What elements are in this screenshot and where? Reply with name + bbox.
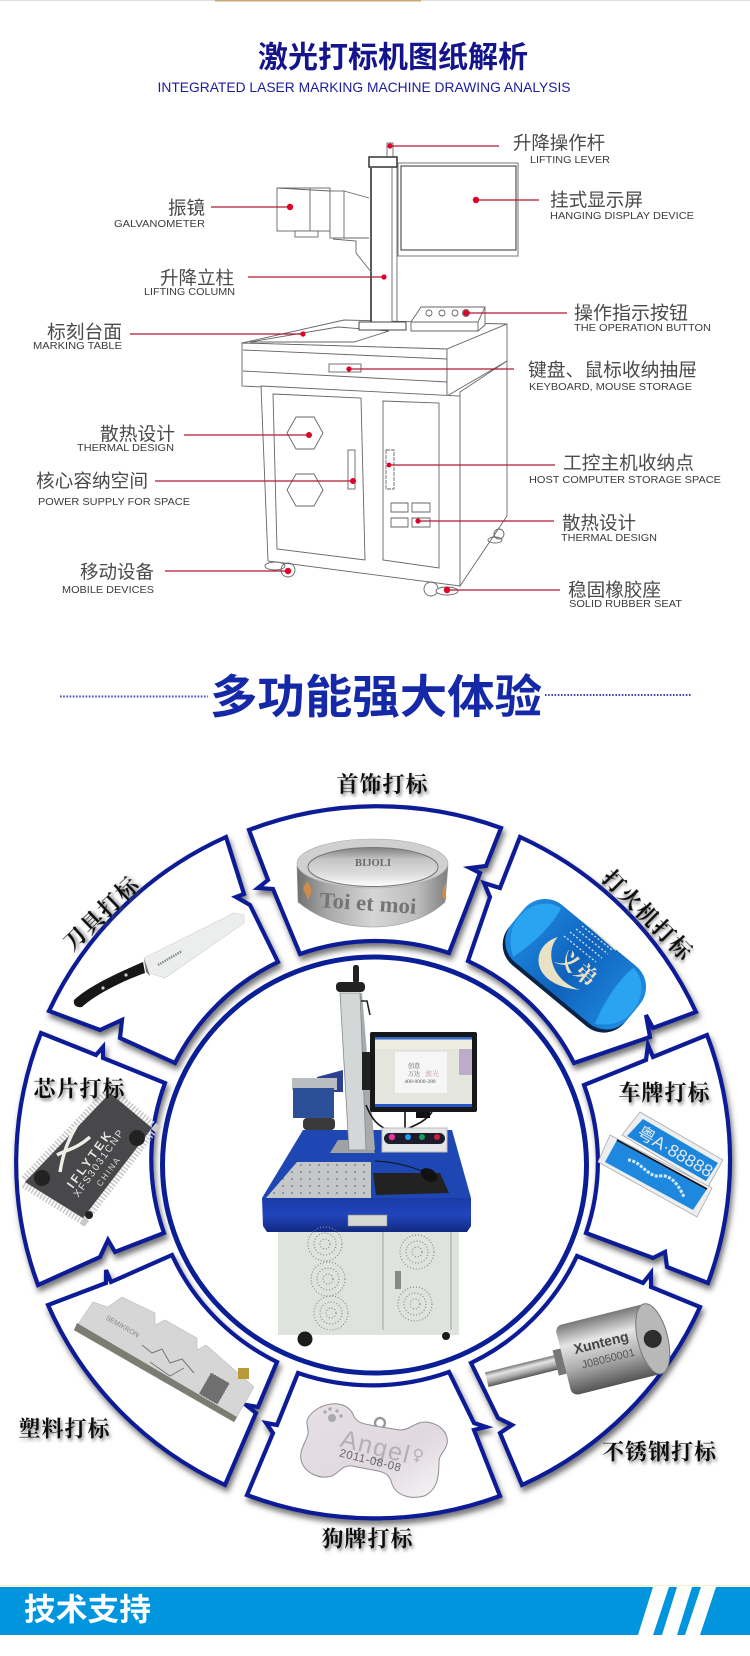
- icon: blue lighter: 义弟: [552, 945, 602, 991]
- callout: lifting column: 升降立柱: [160, 268, 234, 288]
- wheel label: chips: 芯片打标: [32, 1076, 126, 1102]
- callout: galvanometer: [114, 198, 293, 230]
- wheel label: stainless steel: 不锈钢打标: [602, 1440, 718, 1464]
- title: INTEGRATED LASER MARKING MACHINE DRAWING ANALYSIS: [158, 79, 570, 95]
- icon: license plates: 粤A·88888: [634, 1123, 716, 1181]
- wheel sector: dog tags: [247, 1372, 500, 1518]
- galvanometer head: [317, 1070, 343, 1092]
- icon: power module: [74, 1297, 254, 1422]
- callout: hanging display: 挂式显示屏: [550, 190, 643, 210]
- caster wheels: [298, 1332, 312, 1346]
- icon: steel cylinder: [478, 1300, 676, 1415]
- cabinet: [278, 1232, 459, 1335]
- icon: microchip: [25, 1093, 152, 1219]
- central ring: [162, 957, 586, 1373]
- callout: lifting column: LIFTING COLUMN: [144, 286, 235, 298]
- icon: power module: SEMIKRON: [104, 1315, 140, 1339]
- callout: marking table: [33, 322, 306, 352]
- callout: lifting column: [144, 268, 387, 298]
- wheel label: lighters: 打火机打标: [597, 865, 698, 966]
- drawer: [262, 1198, 471, 1232]
- callout: marking table: 标刻台面: [47, 322, 122, 342]
- operation button panel: [382, 1128, 447, 1152]
- callout: operation button: 操作指示按钮: [574, 302, 688, 324]
- wheel label: jewelry: 首饰打标: [336, 772, 429, 797]
- central laser marking machine: 400-0000-288: [404, 1079, 436, 1085]
- callout: rubber seat: 稳固橡胶座: [568, 580, 661, 600]
- central laser marking machine: 万达: [408, 1070, 420, 1078]
- callout: keyboard storage: 键盘、鼠标收纳抽屉: [528, 360, 697, 380]
- wheel sector: stainless steel: [471, 1256, 700, 1485]
- wheel sector: license plates: [584, 1035, 730, 1283]
- callout: operation button: [463, 302, 711, 334]
- icon: microchip: CHINA: [94, 1155, 122, 1188]
- callout: marking table: MARKING TABLE: [33, 340, 122, 352]
- icon: bone dog tag: Angel: [338, 1425, 412, 1469]
- callout: thermal design right: THERMAL DESIGN: [561, 532, 657, 544]
- callout: lifting lever: 升降操作杆: [513, 132, 605, 154]
- callout: keyboard storage: KEYBOARD, MOUSE STORAGE: [529, 381, 692, 393]
- callout: hanging display: HANGING DISPLAY DEVICE: [550, 210, 694, 222]
- callout: operation button: THE OPERATION BUTTON: [574, 322, 711, 334]
- callout: thermal design left: 散热设计: [100, 424, 175, 444]
- callout: lifting lever: LIFTING LEVER: [530, 154, 610, 166]
- callout: host computer storage: HOST COMPUTER STORAGE SPACE: [529, 474, 721, 486]
- icon: microchip: XFS3031CNP: [72, 1128, 126, 1200]
- wheel label: knives: 刀具打标: [59, 871, 145, 956]
- wheel label: plates: 车牌打标: [618, 1080, 711, 1106]
- central laser marking machine: 创意: [408, 1062, 420, 1070]
- callout: mobile devices: MOBILE DEVICES: [62, 584, 154, 596]
- icon: license plates: [598, 1112, 723, 1217]
- footer banner: technical support: 技术支持: [24, 1592, 151, 1628]
- icon: steel cylinder: Xunteng: [572, 1328, 630, 1357]
- callout: mobile devices: [62, 562, 291, 596]
- icon: bone dog tag: [301, 1404, 447, 1497]
- title: [158, 42, 570, 95]
- central laser marking machine: 激光: [425, 1069, 439, 1078]
- callout: rubber seat: [444, 580, 683, 610]
- icon: engraved ring: [297, 839, 448, 927]
- icon: blue lighter: [492, 888, 657, 1044]
- callout: thermal design left: THERMAL DESIGN: [77, 442, 174, 454]
- icon: bone dog tag: 2011-08-08: [338, 1448, 402, 1474]
- wheel sector: plastics: [48, 1255, 277, 1485]
- lifting column: [330, 1140, 375, 1153]
- wheel sector: chips: [16, 1033, 165, 1285]
- machine table top: [262, 1130, 471, 1198]
- wheel sector: knives: [49, 837, 278, 1063]
- central laser marking machine: [262, 965, 477, 1346]
- wheel sector: jewelry: [249, 806, 501, 954]
- callout: host computer storage: 工控主机收纳点: [563, 452, 694, 474]
- footer banner: technical support: [0, 1585, 750, 1635]
- monitor and cables: [366, 1105, 432, 1130]
- icon: microchip: IFLYTEK: [64, 1129, 114, 1191]
- callout: power supply space: 核心容纳空间: [36, 470, 148, 492]
- callout: keyboard storage: [346, 360, 697, 393]
- callout: power supply space: POWER SUPPLY FOR SPACE: [38, 496, 190, 508]
- top edge strip: [0, 0, 750, 2]
- callout: lifting lever: [387, 132, 610, 166]
- icon: steel cylinder: J08050001: [580, 1347, 636, 1372]
- callout: rubber seat: SOLID RUBBER SEAT: [569, 598, 683, 610]
- wheel label: dog tags: 狗牌打标: [322, 1526, 414, 1552]
- callout: thermal design right: [415, 512, 657, 544]
- wheel sector: lighters: [468, 837, 696, 1063]
- callout: host computer storage: [387, 452, 721, 486]
- title: 激光打标机图纸解析: [258, 42, 528, 74]
- callout: thermal design left: [77, 424, 312, 454]
- machine line drawing: [242, 143, 518, 596]
- callout: thermal design right: 散热设计: [562, 512, 636, 534]
- icon: engraved ring: BIJOLI: [355, 857, 391, 869]
- callout: mobile devices: 移动设备: [80, 562, 154, 582]
- callout: hanging display: [473, 190, 694, 222]
- section heading: 多功能强大体验: [210, 671, 542, 723]
- icon: engraved ring: Toi et moi: [319, 887, 417, 919]
- callout: galvanometer: 振镜: [168, 198, 205, 218]
- callout: power supply space: [36, 470, 356, 508]
- icon: kitchen knife: [74, 913, 244, 1007]
- wheel label: plastics: 塑料打标: [18, 1416, 111, 1442]
- callout: galvanometer: GALVANOMETER: [114, 218, 205, 230]
- icon: bone dog tag: ♀: [410, 1444, 426, 1466]
